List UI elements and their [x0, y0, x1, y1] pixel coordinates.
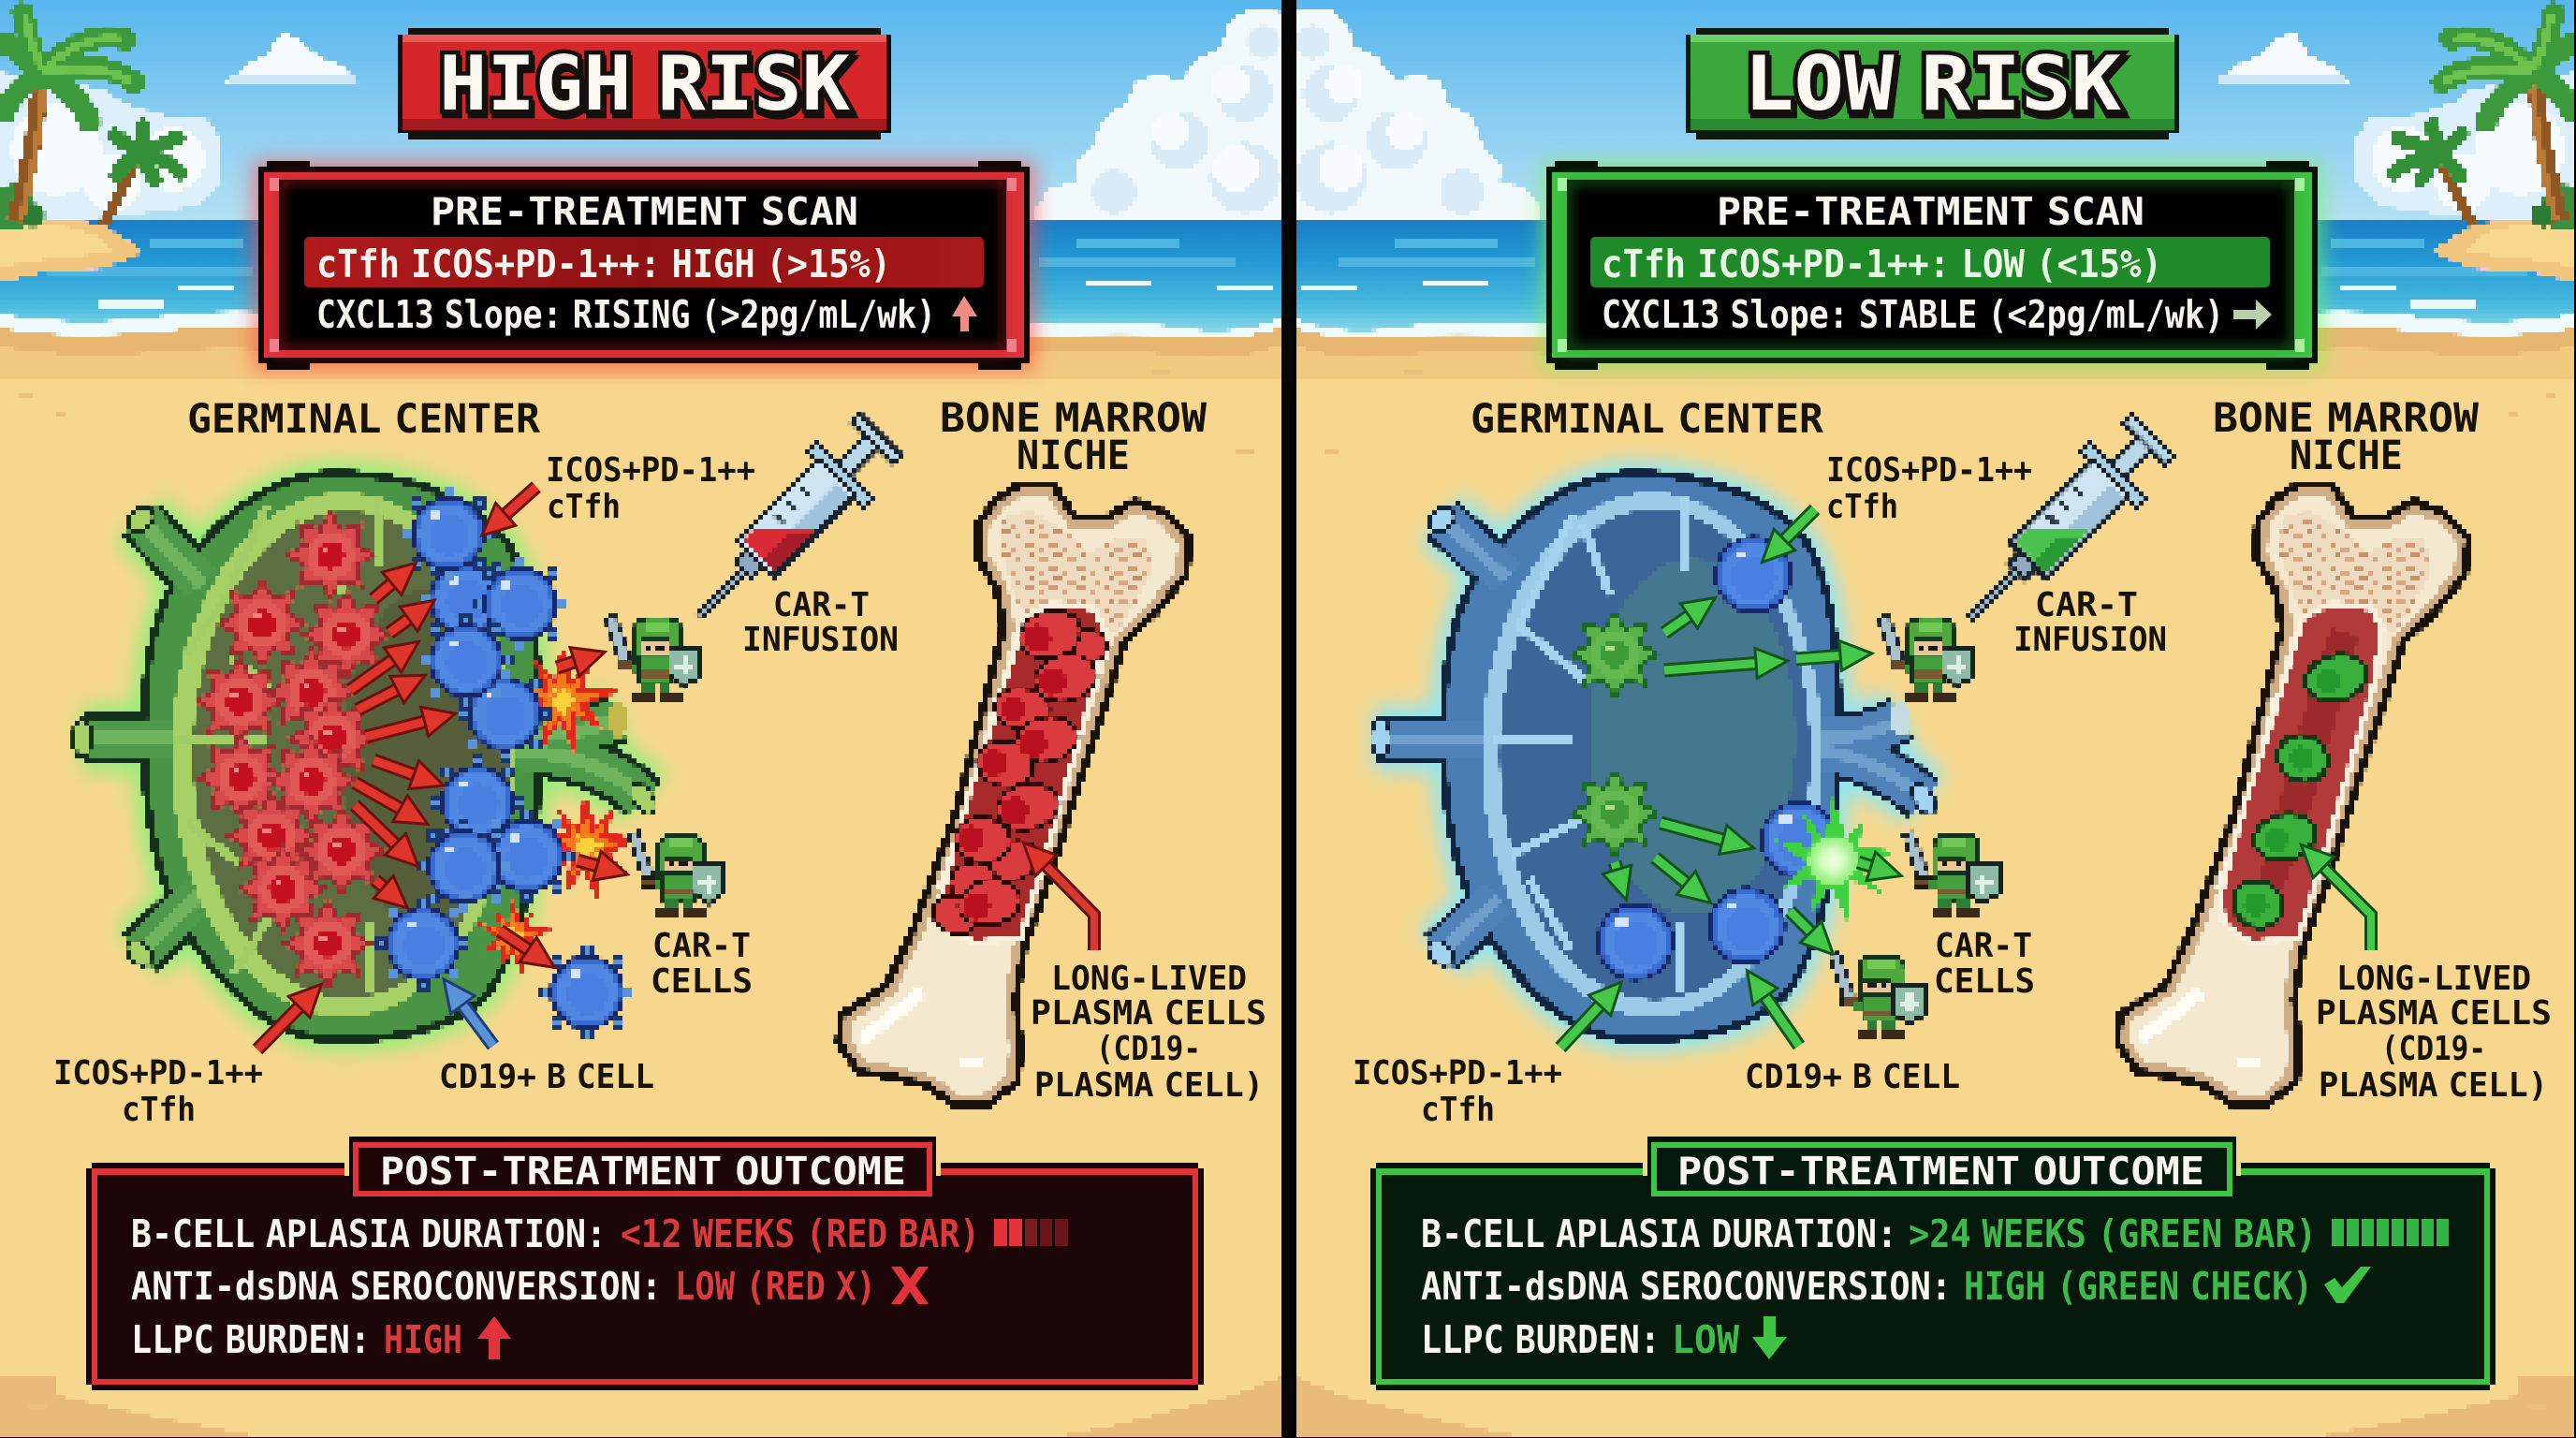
- row: anti-dsDNA seroconversion: [1421, 1264, 2313, 1309]
- row: B-cell aplasia duration: B-CELL APLASIA DURATION:: [131, 1211, 607, 1256]
- label: CAR-T infusion: [2013, 586, 2167, 659]
- label: ICOS+PD-1++ cTfh bottom: cTfh: [1421, 1091, 1495, 1129]
- label: ICOS+PD-1++ cTfh top: [546, 451, 755, 526]
- label: long-lived plasma cells: (CD19-: [2381, 1030, 2486, 1068]
- icon: syringe with green CAR-T: [1943, 407, 2181, 645]
- icon: up arrow: [477, 1316, 511, 1359]
- label: CAR-T cells: [651, 927, 753, 1001]
- panel: low risk side: [1295, 0, 2576, 1438]
- heading: post-treatment outcome: POST-TREATMENT OUTCOME: [380, 1149, 906, 1194]
- heading: bone marrow niche: BONE MARROW: [2213, 395, 2479, 442]
- label: CAR-T infusion: CAR-T: [2035, 586, 2138, 624]
- bone marrow: bone with plasma cells: [839, 484, 1190, 1106]
- label: CAR-T cells: CAR-T: [652, 927, 751, 965]
- row: B-cell aplasia duration: B-CELL APLASIA DURATION:: [1421, 1211, 1897, 1256]
- label: ICOS+PD-1++ cTfh bottom: ICOS+PD-1++: [1353, 1054, 1562, 1093]
- row: LLPC burden: LLPC BURDEN:: [131, 1317, 371, 1362]
- row: CXCL13 slope rising: CXCL13 Slope: RISING (>2pg/mL/wk): [316, 292, 936, 337]
- heading: bone marrow niche: [2213, 395, 2479, 479]
- label: long-lived plasma cells: PLASMA CELL): [1034, 1066, 1264, 1105]
- label: CAR-T cells: CAR-T: [1935, 927, 2032, 965]
- label: long-lived plasma cells: (CD19-: [1096, 1030, 1201, 1068]
- row: LLPC burden: HIGH: [384, 1317, 462, 1362]
- callout arrow: plasma cells: [1033, 853, 1094, 950]
- label: long-lived plasma cells: PLASMA CELLS: [2316, 994, 2552, 1033]
- label: long-lived plasma cells: PLASMA CELLS: [1031, 994, 1266, 1033]
- germinal center: lymph node with cells: [73, 474, 660, 1039]
- heading: post-treatment outcome: POST-TREATMENT OUTCOME: [1677, 1149, 2204, 1194]
- highlighted row: cTfh low: cTfh ICOS+PD-1++: LOW (<15%): [1602, 242, 2162, 286]
- divider: [1281, 0, 1294, 1438]
- icon: rising arrow: [952, 296, 977, 331]
- banner: low risk: [1686, 28, 2179, 139]
- icon: CAR-T soldier: [1904, 832, 1999, 917]
- germinal center: lymph node with cells: [1371, 474, 1940, 1039]
- label: ICOS+PD-1++ cTfh top: cTfh: [1826, 488, 1898, 526]
- bone marrow: bone with plasma cells: [2117, 484, 2468, 1106]
- banner: high risk: [398, 28, 891, 139]
- label: CD19+ B cell: CD19+ B CELL: [1745, 1058, 1960, 1096]
- row: anti-dsDNA seroconversion: ANTI-dsDNA SEROCONVERSION:: [131, 1264, 662, 1309]
- icon: stable arrow: [2233, 300, 2272, 330]
- highlighted row: cTfh high: cTfh ICOS+PD-1++: HIGH (>15%): [316, 242, 891, 286]
- icon: CAR-T soldier: [629, 832, 724, 917]
- label: long-lived plasma cells: LONG-LIVED: [1051, 960, 1247, 998]
- heading: bone marrow niche: [940, 395, 1207, 479]
- label: CAR-T cells: CELLS: [651, 962, 753, 1001]
- label: long-lived plasma cells: PLASMA CELL): [2319, 1066, 2548, 1105]
- label: long-lived plasma cells: [2316, 960, 2552, 1105]
- row: B-cell aplasia duration: <12 WEEKS (RED BAR): [621, 1211, 980, 1256]
- icon: green check: [2324, 1267, 2371, 1303]
- bar: long aplasia: [2332, 1219, 2449, 1246]
- panel: pre-treatment scan: [253, 161, 1035, 371]
- row: B-cell aplasia duration: >24 WEEKS (GREEN BAR): [1909, 1211, 2317, 1256]
- label: ICOS+PD-1++ cTfh bottom: [53, 1054, 263, 1129]
- beach background scene mirrored: [1295, 0, 2576, 1438]
- row: LLPC burden: LLPC BURDEN:: [1421, 1317, 1661, 1362]
- label: CAR-T cells: [1934, 927, 2035, 1001]
- label: CAR-T infusion: [742, 586, 899, 659]
- label: long-lived plasma cells: LONG-LIVED: [2336, 960, 2531, 998]
- panel: pre-treatment scan: [1541, 161, 2323, 371]
- icon: down arrow: [1752, 1316, 1787, 1359]
- label: ICOS+PD-1++ cTfh top: ICOS+PD-1++: [546, 451, 755, 490]
- icon: red x: [891, 1267, 929, 1304]
- heading: germinal center: GERMINAL CENTER: [187, 396, 540, 443]
- label: CD19+ B cell: CD19+ B CELL: [439, 1058, 654, 1096]
- germinal center glow: [1374, 474, 1924, 1039]
- icon: CAR-T soldier: [606, 615, 701, 700]
- icon: CAR-T soldier: [1830, 953, 1925, 1038]
- banner: high risk: HIGH RISK: [439, 40, 850, 127]
- heading: germinal center: GERMINAL CENTER: [1471, 396, 1823, 443]
- label: ICOS+PD-1++ cTfh top: ICOS+PD-1++: [1826, 451, 2032, 490]
- row: anti-dsDNA seroconversion: ANTI-dsDNA SEROCONVERSION:: [1421, 1264, 1952, 1309]
- row: B-cell aplasia duration: [131, 1211, 980, 1256]
- beach background scene: [0, 0, 1281, 1438]
- arrows: signalling and CAR-T: [1560, 509, 1888, 1048]
- label: ICOS+PD-1++ cTfh bottom: [1353, 1054, 1562, 1129]
- label: ICOS+PD-1++ cTfh bottom: ICOS+PD-1++: [53, 1054, 263, 1093]
- icon: syringe with red CAR-T: [670, 406, 908, 644]
- bar: short aplasia: [994, 1219, 1068, 1246]
- banner: low risk: LOW RISK: [1744, 40, 2121, 127]
- panel: post-treatment outcome: [1367, 1137, 2499, 1394]
- label: ICOS+PD-1++ cTfh top: cTfh: [547, 488, 621, 526]
- label: CAR-T infusion: CAR-T: [773, 586, 870, 624]
- callout arrow: plasma cells: [2311, 855, 2371, 950]
- burst: green tumour kill: [1775, 797, 1896, 922]
- label: CAR-T infusion: INFUSION: [742, 621, 899, 659]
- label: ICOS+PD-1++ cTfh bottom: cTfh: [122, 1091, 196, 1129]
- label: ICOS+PD-1++ cTfh top: [1826, 451, 2032, 526]
- heading: bone marrow niche: NICHE: [2290, 433, 2403, 479]
- row: LLPC burden: LOW: [1672, 1317, 1739, 1362]
- heading: pre-treatment scan: PRE-TREATMENT SCAN: [431, 189, 858, 234]
- arrows: cTfh signalling and CAR-T: [257, 487, 614, 1049]
- label: CAR-T infusion: INFUSION: [2013, 621, 2167, 659]
- label: long-lived plasma cells: [1031, 960, 1266, 1105]
- row: anti-dsDNA seroconversion: HIGH (GREEN CHECK): [1964, 1264, 2313, 1309]
- heading: bone marrow niche: BONE MARROW: [940, 395, 1207, 442]
- panel: post-treatment outcome: [82, 1137, 1208, 1394]
- heading: pre-treatment scan: PRE-TREATMENT SCAN: [1717, 189, 2144, 234]
- row: anti-dsDNA seroconversion: LOW (RED X): [675, 1264, 876, 1309]
- germinal center glow: [82, 474, 643, 1039]
- heading: bone marrow niche: NICHE: [1017, 433, 1130, 479]
- panel: high risk side: [0, 0, 1281, 1438]
- label: CAR-T cells: CELLS: [1934, 962, 2035, 1001]
- row: CXCL13 slope stable: CXCL13 Slope: STABLE (<2pg/mL/wk): [1602, 292, 2224, 337]
- row: B-cell aplasia duration: [1421, 1211, 2317, 1256]
- icon: CAR-T soldier: [1879, 615, 1974, 700]
